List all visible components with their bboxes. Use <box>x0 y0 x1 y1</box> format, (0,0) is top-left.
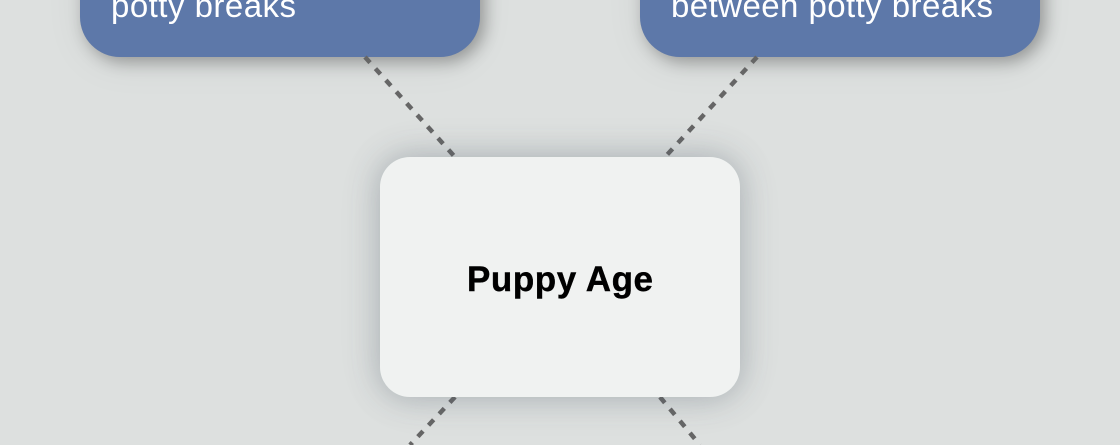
panel: right blue card <box>640 0 1040 57</box>
panel: left blue card <box>80 0 480 57</box>
panel: center Puppy Age card <box>380 157 740 397</box>
center title: Puppy Age <box>467 260 653 299</box>
